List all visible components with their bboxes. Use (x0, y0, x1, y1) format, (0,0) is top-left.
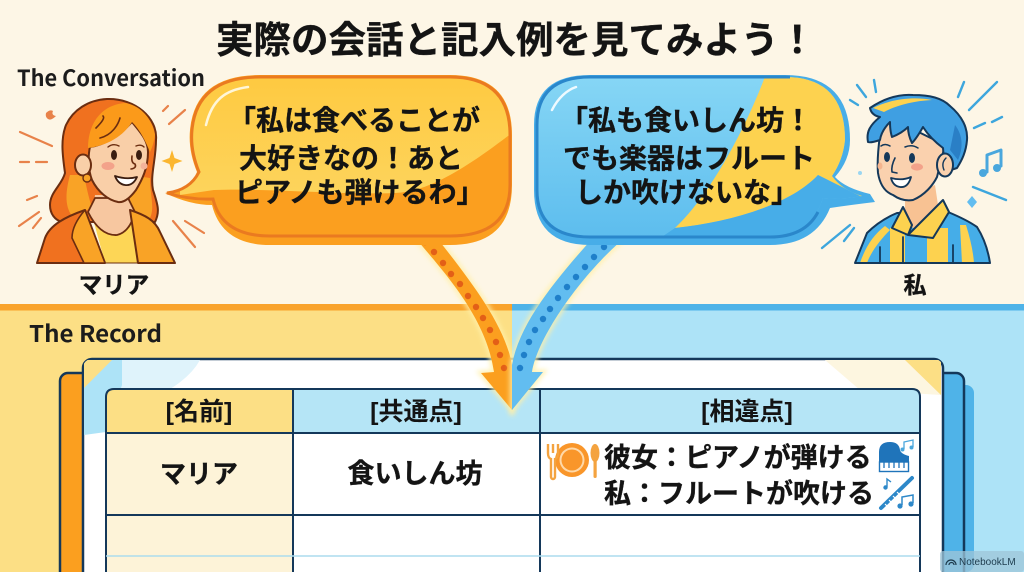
hair front (88, 103, 155, 152)
body (855, 212, 990, 263)
table cell: difference line 1: 彼女：ピアノが弾ける (604, 442, 872, 473)
icon: piano (879, 440, 914, 472)
heading: The Conversation: The Conversation (17, 61, 205, 93)
table: header cells blue (293, 389, 920, 433)
icon: Maria portrait (19, 99, 204, 263)
table cell: difference line 2: 私：フルートが吹ける (604, 478, 874, 509)
hair back (50, 99, 158, 222)
table cell: foodie: 食いしん坊 (348, 459, 482, 489)
face (878, 118, 945, 200)
icon: plate, fork and spoon (548, 443, 600, 479)
label: Maria: マリア (79, 272, 149, 298)
neck (92, 195, 130, 215)
arrow: orange from Maria bubble to table (413, 235, 512, 410)
table cell: Maria: マリア (160, 459, 238, 489)
panel: record background (0, 304, 1024, 572)
text: my quote (560, 105, 815, 208)
text: Maria quote (228, 104, 484, 208)
watermark: NotebookLM: NotebookLM (959, 557, 1016, 568)
title: 実際の会話と記入例を見てみよう！ (216, 19, 816, 61)
text: my quote: しか吹けないな」 (575, 177, 799, 208)
text: Maria quote: ピアノも弾けるわ」 (235, 177, 484, 208)
collar (892, 207, 912, 235)
text: Maria quote: 「私は食べることが (228, 104, 480, 136)
face (89, 122, 148, 202)
neck (905, 185, 938, 232)
table (106, 389, 920, 572)
text: Maria quote: 大好きなの！あと (239, 143, 463, 174)
table: name column body (106, 433, 293, 572)
label: me: 私 (904, 272, 926, 298)
table header: differences: [相違点] (701, 398, 793, 426)
icon: flute (881, 478, 914, 509)
text: my quote: でも楽器はフルート (563, 143, 815, 174)
icon: boy portrait (822, 80, 1006, 263)
shirt (92, 215, 137, 263)
heading: The Record: The Record (29, 315, 162, 349)
jacket (37, 210, 105, 263)
table header: name: [名前] (166, 398, 232, 426)
arrow: blue from my bubble to table (512, 232, 628, 410)
text: my quote: 「私も食いしん坊！ (560, 105, 812, 136)
table: header name cell (106, 389, 293, 433)
hair (868, 95, 967, 172)
panel: notebook (60, 359, 974, 572)
speech bubble: me (534, 74, 880, 245)
speech bubble: Maria (165, 70, 512, 245)
watermark: NotebookLM (940, 551, 1024, 572)
table header: common points: [共通点] (370, 398, 462, 426)
